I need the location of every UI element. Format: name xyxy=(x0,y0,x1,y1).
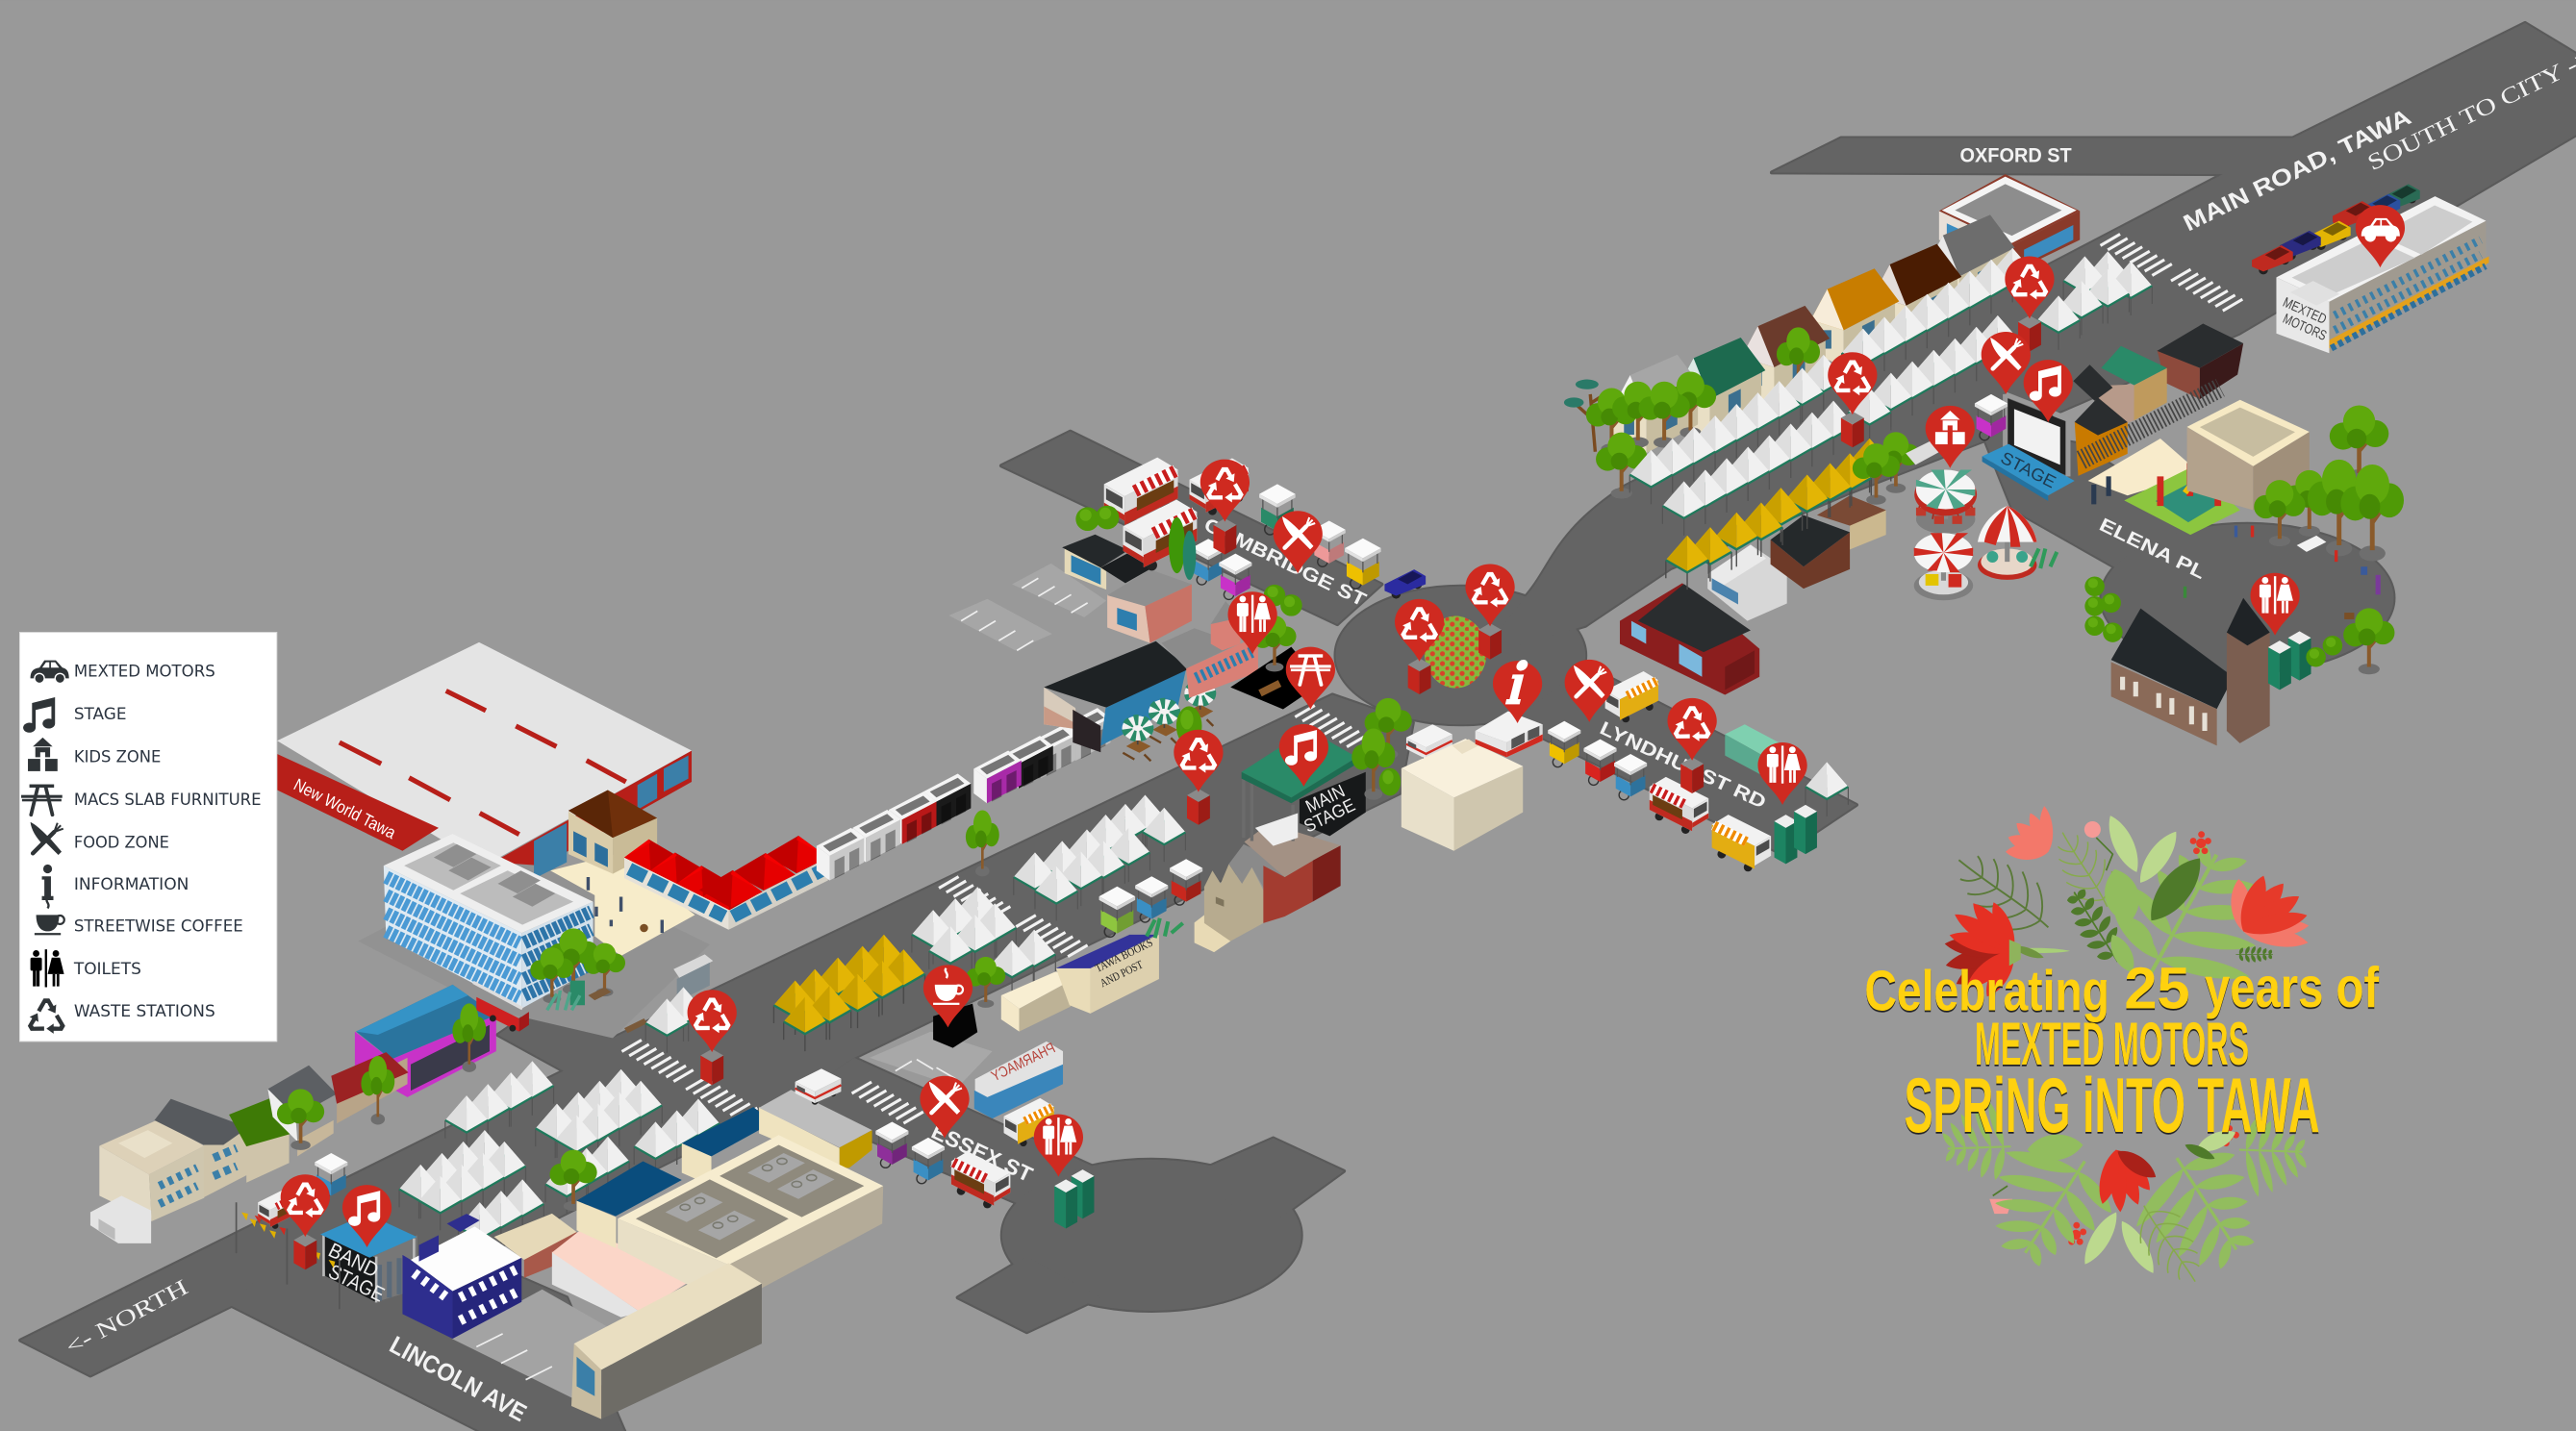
trees by main stage xyxy=(1351,698,1412,800)
tree xyxy=(1252,615,1297,671)
roundabout garden xyxy=(1425,616,1487,689)
building: grey warehouse xyxy=(571,1263,762,1419)
building: band stage xyxy=(320,1214,417,1307)
building: pharmacy xyxy=(974,1040,1063,1118)
Mexted Motors cars xyxy=(2252,184,2420,274)
white truck xyxy=(1906,436,1955,464)
shop row: lower left xyxy=(90,1003,486,1243)
street label: Cambridge St: CAMBRIDGE ST xyxy=(1200,515,1369,611)
shrub xyxy=(1176,706,1202,745)
cream blocks xyxy=(1001,971,1071,1032)
white market tents east xyxy=(1629,248,2152,536)
pink cart xyxy=(1975,394,2008,440)
street label: Elena Pl: ELENA PL xyxy=(2096,515,2209,584)
pin: food zones xyxy=(920,332,2031,1139)
red flower left xyxy=(1944,897,2021,1001)
grey gable house xyxy=(267,1066,337,1156)
legend panel xyxy=(19,633,277,1042)
shop row centre xyxy=(817,708,1111,880)
stage label: STAGE xyxy=(1998,448,2059,491)
building: brick and grey roof hall xyxy=(1161,601,1258,698)
vans and carts on Cambridge St xyxy=(1104,458,1381,599)
street label: south to city: SOUTH TO CITY -> xyxy=(2363,45,2576,176)
building: pink roof xyxy=(552,1226,690,1318)
street label: Main Road: MAIN ROAD, TAWA xyxy=(2180,104,2415,237)
yellow tents east xyxy=(1666,439,1891,590)
tree xyxy=(549,1150,597,1211)
market stalls xyxy=(1099,859,1202,938)
dark brick building xyxy=(2157,323,2243,399)
pin: kids zone xyxy=(1926,406,1975,468)
white van and cart behind stage xyxy=(258,1153,347,1229)
bus shelter xyxy=(673,954,713,1002)
white market tents centre xyxy=(912,795,1185,994)
red house xyxy=(1620,583,1759,694)
pin: stages xyxy=(342,360,2073,1247)
building: band stage: STAGE xyxy=(325,1260,388,1307)
legend: Toilets xyxy=(31,949,141,987)
building: Oxford St corner xyxy=(1939,174,2080,273)
slogan: years of xyxy=(2205,955,2380,1019)
white stalls: street tents west xyxy=(399,987,720,1257)
legend: Stage xyxy=(23,697,127,733)
beige hotel xyxy=(99,1119,204,1221)
umbrellas xyxy=(1123,681,1216,761)
stone building xyxy=(2187,400,2310,511)
building sign: MEXTED xyxy=(2281,295,2329,328)
top botanicals xyxy=(1941,811,2303,1017)
pin: streetwise coffee xyxy=(923,965,972,1027)
fence xyxy=(2082,388,2220,460)
houses row along Main Road xyxy=(1611,214,2015,453)
sign text: New World Tawa xyxy=(290,775,399,842)
building: houses behind stage xyxy=(2073,323,2243,476)
legend: Food Zone: FOOD ZONE xyxy=(74,833,169,852)
pin: Mexted Motors xyxy=(2356,205,2405,267)
slogan xyxy=(1864,955,2380,1149)
legend: Stage: STAGE xyxy=(74,705,127,724)
building: blue roof magenta shop xyxy=(355,985,496,1097)
Lyndhurst Rd vehicles xyxy=(1605,671,1848,871)
building: black roof xyxy=(1062,535,1156,590)
pin: information xyxy=(1493,660,1542,723)
street label: Lincoln Ave: LINCOLN AVE xyxy=(385,1332,531,1427)
black seating patch with bench xyxy=(1230,647,1322,710)
small cream house xyxy=(1817,495,1886,549)
legend: Toilets: TOILETS xyxy=(73,960,141,979)
carnival rides xyxy=(1914,469,2057,600)
legend: Mexted Motors xyxy=(31,661,215,684)
legend: Kids Zone: KIDS ZONE xyxy=(74,748,161,767)
building: blue glass office xyxy=(384,834,593,1009)
street label: Oxford St: OXFORD ST xyxy=(1960,143,2072,166)
street label: Essex St: ESSEX ST xyxy=(928,1119,1037,1187)
coffee van xyxy=(933,1004,977,1048)
mirrored sign: PHARMACY xyxy=(989,1040,1058,1085)
street label: Lyndhurst Rd: LYNDHURST RD xyxy=(1597,717,1769,814)
trees around Elena Pl xyxy=(2084,405,2404,674)
coral flower top xyxy=(2006,806,2055,860)
orange van xyxy=(1004,1098,1054,1146)
shrubs and columnar trees xyxy=(1075,506,1302,616)
yellow market tents xyxy=(773,935,925,1051)
sidewalk and parking lots xyxy=(358,564,1106,1399)
building: Mexted Motors xyxy=(2276,196,2488,353)
legend: Information xyxy=(42,865,189,900)
bunting flags xyxy=(237,1202,340,1309)
legend: Kids Zone xyxy=(28,738,161,771)
tan house xyxy=(2073,346,2167,436)
fire truck xyxy=(473,982,529,1032)
building: Mexted Motors: MOTORS xyxy=(2281,312,2329,344)
plaza and lawn xyxy=(2088,439,2240,535)
legend: Macs Slab Furniture: MACS SLAB FURNITURE xyxy=(74,791,262,810)
food carts on Essex St xyxy=(875,1122,1010,1208)
building: main stage xyxy=(1242,729,1366,846)
legend: Macs Slab Furniture xyxy=(21,785,262,815)
legend: Information: INFORMATION xyxy=(74,875,189,894)
legend: Waste Stations xyxy=(24,998,215,1037)
people on Elena Pl xyxy=(2091,476,2381,619)
building: old town cluster xyxy=(1195,823,1341,952)
floral wreath artwork xyxy=(1864,806,2380,1299)
brown house xyxy=(1771,515,1850,589)
legend: Streetwise Coffee: STREETWISE COFFEE xyxy=(74,916,243,936)
building: blue roof shops xyxy=(576,1107,772,1248)
plaza with people xyxy=(550,854,695,956)
slogan: Celebrating xyxy=(1864,958,2109,1022)
building: red roof shops xyxy=(624,836,828,930)
bottom botanicals xyxy=(1939,1098,2311,1299)
portable toilets xyxy=(1054,1169,1094,1229)
white porch xyxy=(90,1195,151,1243)
street label: north: <- NORTH xyxy=(62,1274,191,1359)
trees west of tents xyxy=(1564,327,1820,498)
building: tan roof brick xyxy=(494,1214,576,1278)
orange house xyxy=(2075,397,2128,476)
sign: MAIN xyxy=(1302,780,1348,816)
pale grey house xyxy=(1707,544,1787,621)
building: brown roof corner xyxy=(568,791,657,874)
slogan: 25 xyxy=(2124,956,2190,1022)
pin: toilets xyxy=(1034,573,2300,1177)
building: dark roof pub xyxy=(1044,641,1189,752)
bouncy castle xyxy=(2156,464,2221,522)
church xyxy=(2111,598,2270,745)
legend: Streetwise Coffee xyxy=(35,898,243,936)
pin: Macs slab furniture xyxy=(1286,647,1335,710)
building: Tawa Books and Post: AND POST xyxy=(1098,957,1146,990)
slogan: MEXTED MOTORS xyxy=(1975,1011,2249,1078)
building: New World Tawa supermarket xyxy=(277,642,692,879)
crosswalks xyxy=(621,234,2242,1123)
pin: waste stations xyxy=(281,256,2055,1269)
stage: Elena Pl xyxy=(1983,394,2075,501)
building: pink gabled xyxy=(1107,569,1192,643)
trees and furniture by office xyxy=(530,928,647,1033)
ambulance xyxy=(796,1068,841,1105)
building: Tawa Books and Post xyxy=(1056,935,1159,1014)
cream cube building xyxy=(1402,739,1523,851)
ambulance xyxy=(1406,724,1452,761)
tree xyxy=(966,957,1005,1008)
info van and carts xyxy=(1476,712,1647,800)
building: navy blue shop xyxy=(402,1214,521,1339)
tree xyxy=(966,810,999,876)
sign: TAWA BOOKS xyxy=(1093,936,1155,975)
small flowers xyxy=(1989,821,2239,1245)
legend: Food Zone xyxy=(31,822,169,855)
grey roof house xyxy=(155,1099,248,1197)
salmon flower right xyxy=(2229,872,2310,951)
building: large cream department xyxy=(618,1135,883,1306)
police car xyxy=(1384,569,1426,599)
legend: Waste Stations: WASTE STATIONS xyxy=(74,1002,215,1021)
trees by carnival xyxy=(1853,432,1920,505)
dark red shop xyxy=(331,1052,409,1123)
legend: Mexted Motors: MEXTED MOTORS xyxy=(74,663,215,682)
portable toilets xyxy=(2268,631,2311,690)
building: main stage: STAGE xyxy=(1301,794,1358,837)
green roof house xyxy=(229,1094,292,1183)
building: yellow end shed xyxy=(759,1090,872,1167)
stage sign: BAND xyxy=(325,1239,382,1282)
